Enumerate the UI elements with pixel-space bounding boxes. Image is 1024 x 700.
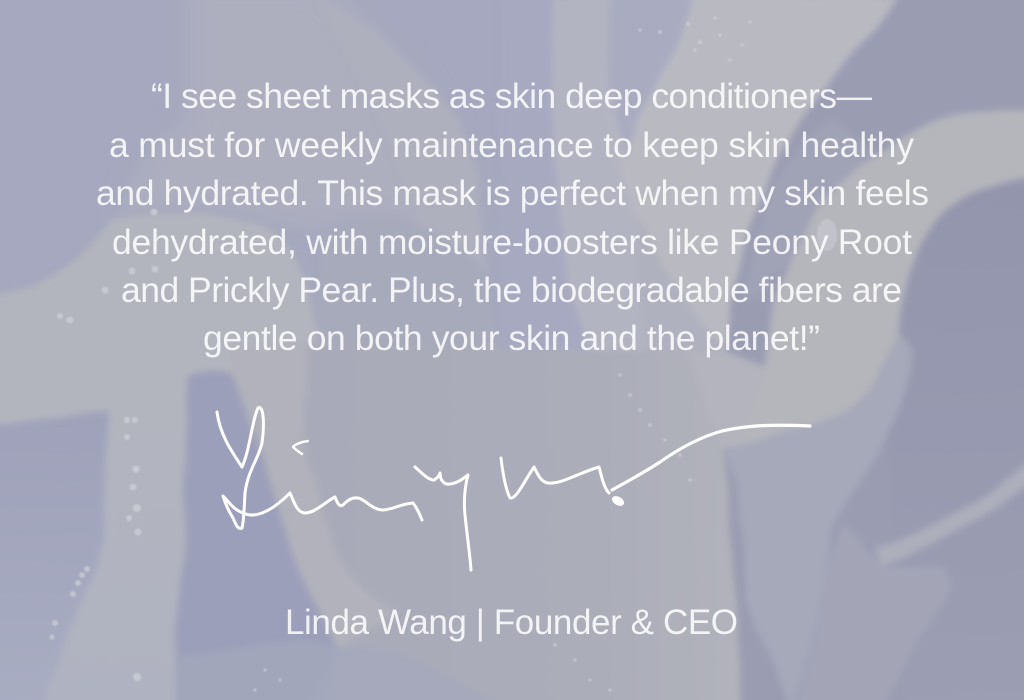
sparkles — [50, 16, 837, 692]
quote text block — [96, 76, 929, 358]
quote text block: and hydrated. This mask is perfect when my skin feels — [96, 173, 929, 213]
signature — [217, 408, 810, 570]
quote text block: and Prickly Pear. Plus, the biodegradable fibers are — [121, 270, 902, 310]
quote text block: gentle on both your skin and the planet!” — [203, 318, 820, 358]
attribution: Linda Wang | Founder & CEO — [285, 603, 738, 642]
quote text block: a must for weekly maintenance to keep skin healthy — [109, 125, 914, 165]
quote text block: dehydrated, with moisture-boosters like Peony Root — [112, 222, 912, 262]
quote text block: “I see sheet masks as skin deep conditioners— — [151, 76, 872, 116]
